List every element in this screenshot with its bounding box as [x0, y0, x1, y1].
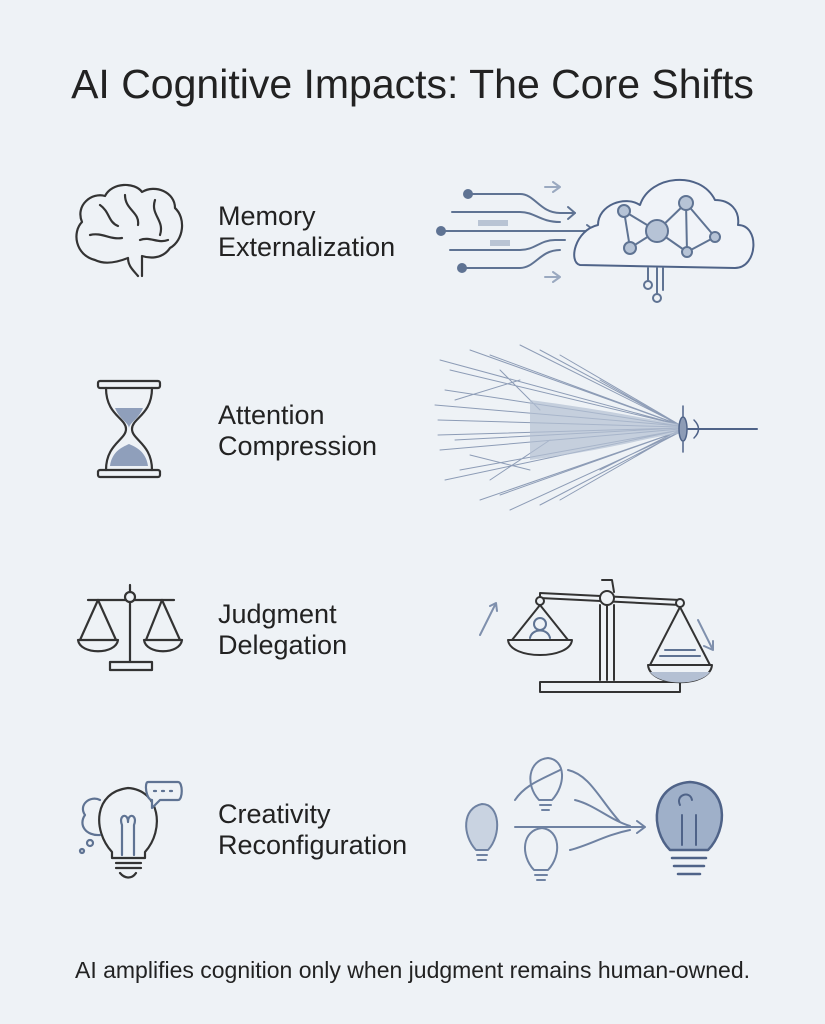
icon: brain [76, 185, 182, 276]
label: memory [218, 201, 395, 262]
label: judgment: Delegation [218, 630, 347, 660]
label: creativity: Reconfiguration [218, 830, 407, 860]
icon: hourglass [98, 381, 160, 477]
label: creativity: Creativity [218, 799, 331, 829]
label: memory: Externalization [218, 232, 395, 262]
label: attention: Compression [218, 431, 377, 461]
footer: AI amplifies cognition only when judgment remains human-owned. [75, 957, 750, 983]
icon: lightbulb with bubble [80, 782, 182, 878]
label: creativity [218, 799, 407, 860]
title: AI Cognitive Impacts: The Core Shifts [71, 61, 754, 107]
label: attention: Attention [218, 400, 325, 430]
label: judgment: Judgment [218, 599, 337, 629]
label: memory: Memory [218, 201, 316, 231]
label: attention [218, 400, 377, 461]
illustration: attention funnel [435, 345, 757, 510]
illustration: memory cloud network [437, 180, 753, 302]
illustration: scale tilted [480, 580, 713, 692]
illustration: bulbs combining [466, 758, 722, 880]
icon: scale small [78, 585, 182, 670]
label: judgment [218, 599, 347, 660]
